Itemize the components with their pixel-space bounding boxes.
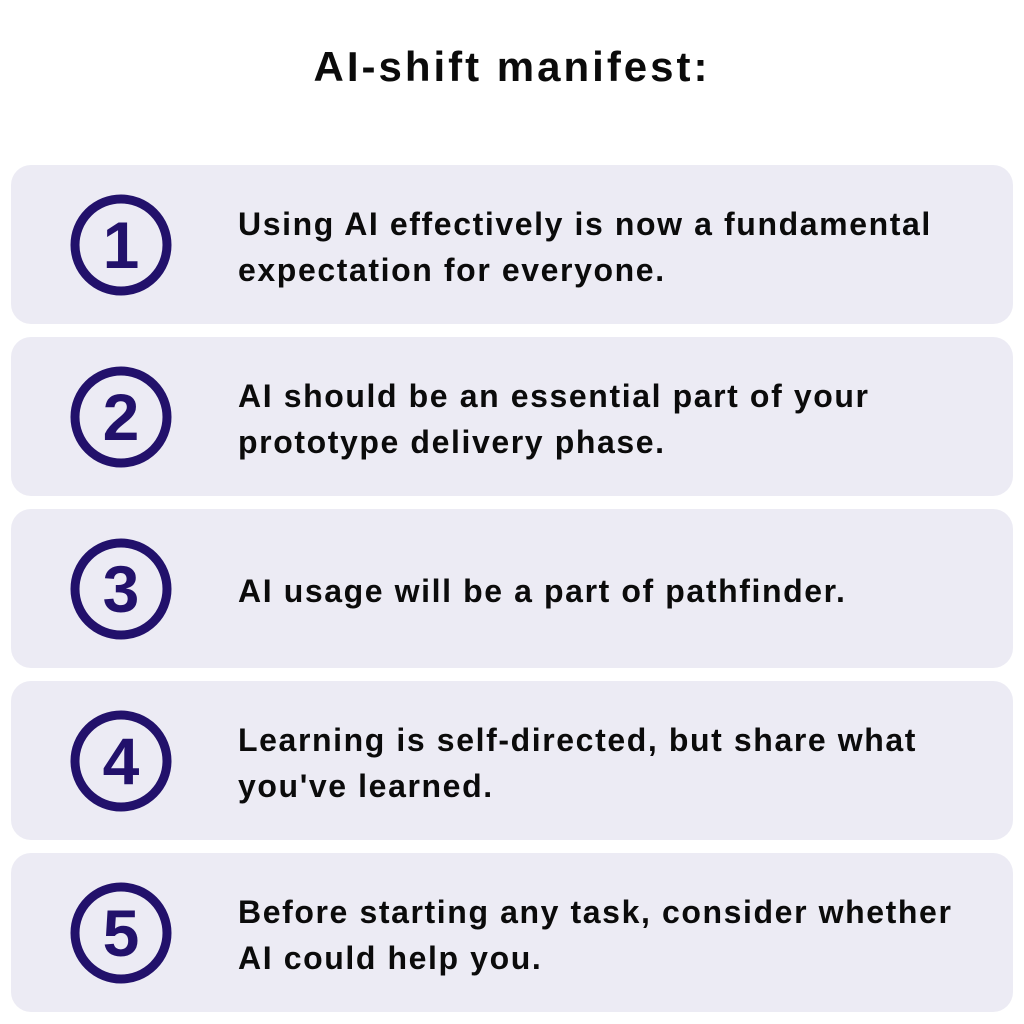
text 1: Using AI effectively is now a fundamental (238, 206, 932, 242)
text 4 (238, 722, 917, 804)
icon: number 5 (70, 882, 172, 984)
text 4: Learning is self-directed, but share what (238, 722, 917, 758)
text 5 (238, 894, 952, 976)
text 5: Before starting any task, consider whether (238, 894, 952, 930)
icon: number 1: 1 (103, 208, 139, 282)
icon: number 2: 2 (103, 380, 139, 454)
panel: item 2 (11, 337, 1013, 496)
title: AI-shift manifest: (313, 43, 710, 90)
text 2: prototype delivery phase. (238, 424, 666, 460)
text 1 (238, 206, 932, 288)
icon: number 2 (70, 366, 172, 468)
panel: item 4 (11, 681, 1013, 840)
panel: item 3 (11, 509, 1013, 668)
icon: number 4: 4 (103, 724, 140, 798)
text 4: you've learned. (238, 768, 494, 804)
icon: number 3 (70, 538, 172, 640)
text 5: AI could help you. (238, 940, 542, 976)
text 2 (238, 378, 870, 460)
panel: item 5 (11, 853, 1013, 1012)
icon: number 3: 3 (103, 552, 139, 626)
icon: number 4 (70, 710, 172, 812)
text 2: AI should be an essential part of your (238, 378, 870, 414)
icon: number 1 (70, 194, 172, 296)
panel: item 1 (11, 165, 1013, 324)
text 3: AI usage will be a part of pathfinder. (238, 572, 846, 608)
icon: number 5: 5 (103, 896, 139, 970)
text 1: expectation for everyone. (238, 252, 666, 288)
